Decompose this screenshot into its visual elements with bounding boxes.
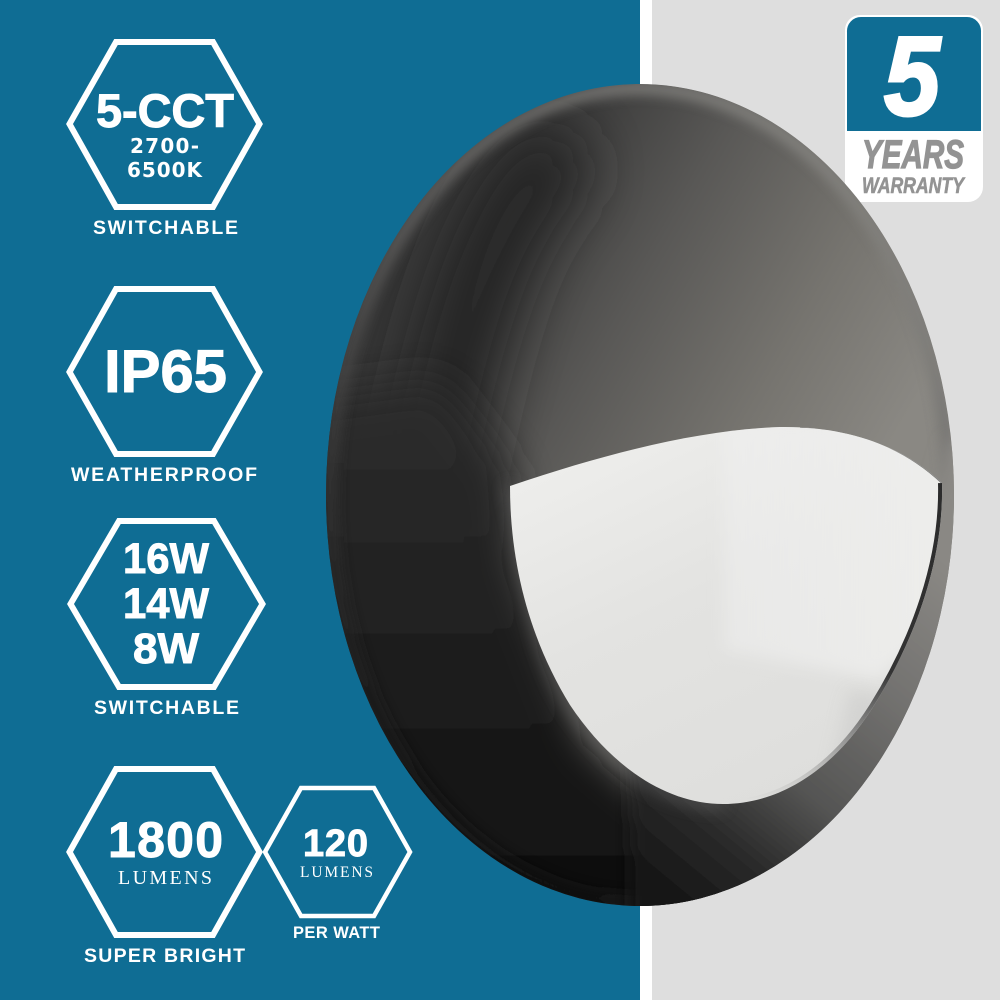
lamp body [326,84,954,906]
heading: IP65: IP65 [104,338,227,405]
text: lumens: LUMENS [300,864,373,881]
badge: wattage [70,521,262,719]
hexagon outline [70,42,260,207]
text: 16W: 16W [123,535,209,583]
product: eyelid wall light [326,84,954,906]
number: 5: 5 [884,14,942,139]
hexagon outline [70,289,260,454]
heading: 5-CCT: 5-CCT [96,84,234,137]
label: per watt: PER WATT [293,924,380,942]
warranty badge [845,14,983,202]
panel: white divider strip [640,0,652,1000]
lens: frosted diffuser [510,420,950,804]
label: weatherproof: WEATHERPROOF [71,464,257,486]
badge: IP65 [70,289,260,486]
heading: 120: 120 [303,823,368,865]
text: lumens: LUMENS [118,867,212,889]
hexagon outline [265,788,410,916]
badge: 5-CCT [70,42,260,239]
blue header [847,17,981,131]
panel: grey background [652,0,1000,1000]
text: years: YEARS [862,133,964,177]
hexagon outline [70,769,260,935]
label: switchable: SWITCHABLE [94,697,239,719]
heading: 1800: 1800 [108,812,223,868]
label: switchable: SWITCHABLE [93,217,238,239]
text: 2700-: 2700- [130,134,199,158]
badge card [845,15,983,202]
panel: blue background [0,0,640,1000]
hexagon outline [70,521,262,687]
text: 8W: 8W [133,625,199,673]
badge: 1800 lumens [70,769,260,967]
badge: 120 lumens per watt [265,788,410,942]
label: super bright: SUPER BRIGHT [84,945,245,967]
text: warranty: WARRANTY [862,173,966,198]
text: 6500K: 6500K [127,158,204,182]
text: 14W: 14W [123,580,209,628]
